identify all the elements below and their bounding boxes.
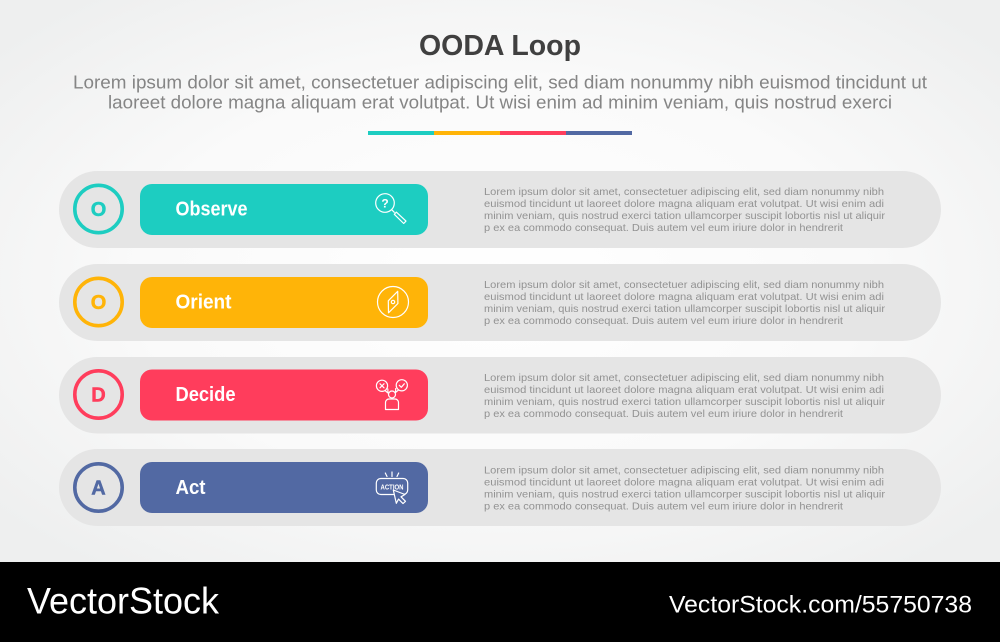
panel: Act [59, 449, 941, 526]
icon: action button with cursor [376, 472, 408, 504]
colored divider bar [368, 131, 632, 135]
letter badge A [75, 464, 122, 511]
label bar: Act [140, 462, 428, 513]
description text [484, 372, 886, 420]
icon: person deciding between cross and check [376, 380, 407, 410]
description text [484, 279, 886, 327]
panel: Decide [59, 357, 941, 434]
description text: Lorem ipsum dolor sit amet, consectetuer adipiscing elit, sed diam nonummy nibh [484, 279, 884, 291]
footer band [0, 562, 1000, 642]
description text: euismod tincidunt ut laoreet dolore magna aliquam erat volutpat. Ut wisi enim adi [484, 476, 884, 488]
letter badge D: D [91, 384, 106, 406]
icon: compass [378, 286, 408, 318]
description text: euismod tincidunt ut laoreet dolore magna aliquam erat volutpat. Ut wisi enim adi [484, 291, 884, 303]
letter badge O [75, 278, 122, 326]
description text: minim veniam, quis nostrud exerci tation ullamcorper suscipit lobortis nisl ut aliquir [484, 210, 886, 222]
letter badge D [75, 371, 122, 418]
title: OODA Loop [419, 30, 581, 62]
description text: p ex ea commodo consequat. Duis autem vel eum iriure dolor in hendrerit [484, 500, 843, 512]
icon: magnifying glass with question mark [376, 194, 406, 224]
description text: minim veniam, quis nostrud exerci tation ullamcorper suscipit lobortis nisl ut aliquir [484, 488, 886, 500]
panel: Observe [59, 171, 941, 248]
label bar: Observe [140, 184, 428, 235]
description text: Lorem ipsum dolor sit amet, consectetuer adipiscing elit, sed diam nonummy nibh [484, 464, 884, 476]
subtitle text: laoreet dolore magna aliquam erat volutpat. Ut wisi enim ad minim veniam, quis nostrud exerci [108, 92, 892, 112]
letter badge O: O [91, 292, 106, 314]
subtitle text: Lorem ipsum dolor sit amet, consectetuer adipiscing elit, sed diam nonummy nibh euismod tincidunt ut [73, 72, 927, 92]
label bar: Orient: Orient [176, 292, 232, 314]
description text: minim veniam, quis nostrud exerci tation ullamcorper suscipit lobortis nisl ut aliquir [484, 396, 886, 408]
description text: Lorem ipsum dolor sit amet, consectetuer adipiscing elit, sed diam nonummy nibh [484, 372, 884, 384]
description text: p ex ea commodo consequat. Duis autem vel eum iriure dolor in hendrerit [484, 315, 843, 327]
letter badge O [75, 185, 122, 233]
subtitle text [73, 72, 927, 112]
label bar: Decide [140, 370, 428, 420]
icon: magnifying glass with question mark: ? [381, 196, 389, 210]
description text: Lorem ipsum dolor sit amet, consectetuer adipiscing elit, sed diam nonummy nibh [484, 186, 884, 198]
label bar: Observe: Observe [176, 199, 248, 221]
letter badge O: O [91, 199, 106, 221]
description text: euismod tincidunt ut laoreet dolore magna aliquam erat volutpat. Ut wisi enim adi [484, 384, 884, 396]
panel: Orient [59, 264, 941, 341]
description text [484, 464, 886, 512]
label bar: Act: Act [176, 477, 206, 499]
label bar: Orient [140, 277, 428, 328]
icon: action button with cursor: ACTION [380, 484, 404, 491]
footer logo text: VectorStock [27, 580, 219, 622]
footer image id: VectorStock.com/55750738 [669, 592, 972, 618]
description text: euismod tincidunt ut laoreet dolore magna aliquam erat volutpat. Ut wisi enim adi [484, 198, 884, 210]
description text: p ex ea commodo consequat. Duis autem vel eum iriure dolor in hendrerit [484, 222, 843, 234]
description text: p ex ea commodo consequat. Duis autem vel eum iriure dolor in hendrerit [484, 408, 843, 420]
letter badge A: A [91, 478, 106, 500]
label bar: Decide: Decide [176, 384, 236, 406]
description text [484, 186, 886, 234]
description text: minim veniam, quis nostrud exerci tation ullamcorper suscipit lobortis nisl ut aliquir [484, 303, 886, 315]
